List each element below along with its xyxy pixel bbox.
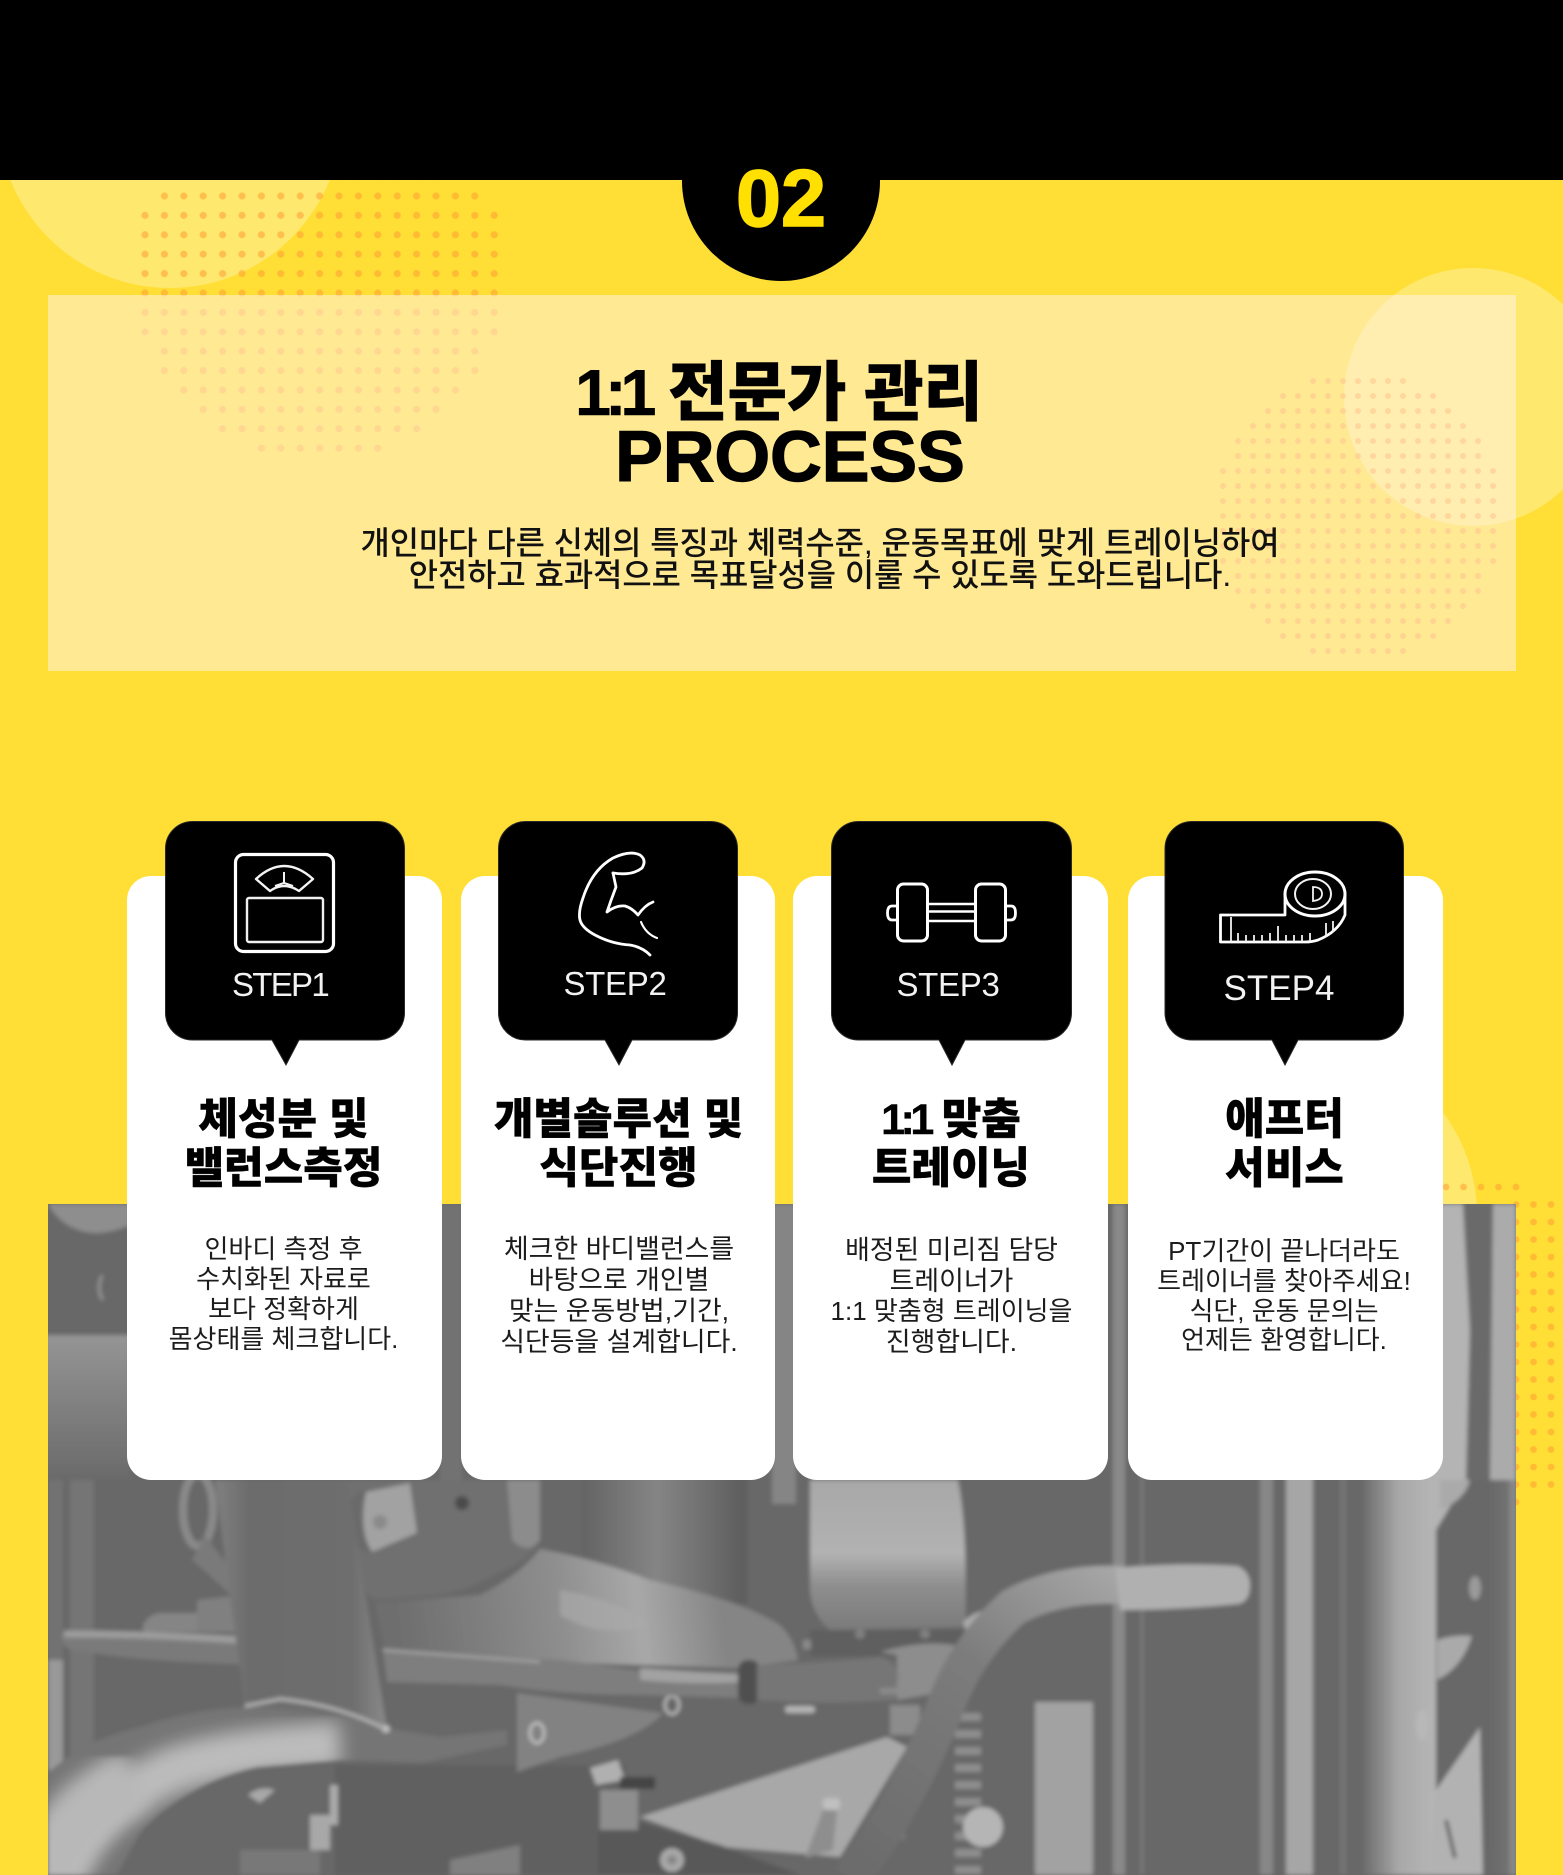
vertical stripes [48,1480,63,1875]
heading [575,357,983,497]
card: step 1 [127,821,442,1480]
chain [955,1713,981,1875]
upper left [40,1335,130,1480]
card title: 개별솔루션 및 [494,1096,743,1144]
lower plate [517,1693,663,1772]
card title: 1:1 맞춤 [881,1096,1021,1144]
card: step 2 [461,821,775,1480]
card title [185,1096,382,1192]
card description [169,1234,398,1354]
card description: 맞는 운동방법,기간, [509,1296,729,1326]
number 02: 02 [736,154,826,244]
card title: 애프터 [1225,1096,1344,1144]
number badge 02 [682,81,880,281]
grip [1115,1564,1250,1610]
card description [831,1235,1072,1357]
card description: 식단, 운동 문의는 [1189,1296,1379,1326]
step label: STEP4 [1224,969,1334,1008]
card description: 몸상태를 체크합니다. [169,1324,398,1354]
speech bubble with muscle icon [498,821,738,1066]
card title [872,1096,1030,1192]
backrest [340,1480,540,1600]
card description: 1:1 맞춤형 트레이닝을 [831,1296,1072,1326]
seat [375,1549,798,1668]
post [215,1480,387,1730]
card description: 수치화된 자료로 [196,1264,371,1294]
card description: 보다 정확하게 [208,1294,359,1324]
speech bubble with scale icon [165,821,405,1066]
intro line 2: 안전하고 효과적으로 목표달성을 이룰 수 있도록 도와드립니다. [409,557,1231,593]
right columns [1360,1204,1470,1875]
card title [494,1096,743,1192]
card title [1225,1096,1344,1192]
card description: 체크한 바디밸런스를 [504,1234,734,1264]
card background [793,876,1108,1480]
step label: STEP3 [896,966,1000,1003]
card description: 바탕으로 개인별 [529,1265,709,1295]
card background [1128,876,1443,1480]
lower dark mechanics [335,1765,625,1875]
panel: intro background [48,295,1516,671]
handle tube blob behind [963,1610,997,1640]
intro line 1: 개인마다 다른 신체의 특징과 체력수준, 운동목표에 맞게 트레이닝하여 [360,525,1280,561]
card description: 트레이너를 찾아주세요! [1157,1266,1411,1296]
speech bubble with measuring tape icon [1164,821,1404,1066]
card description: 배정된 미리짐 담당 [845,1235,1058,1265]
card title: 체성분 및 [198,1096,369,1144]
card background [127,876,442,1480]
heading line 1: 1:1 전문가 관리 [575,357,983,429]
card title: 식단진행 [539,1144,698,1192]
card description: 인바디 측정 후 [205,1234,362,1264]
card title: 트레이닝 [872,1144,1030,1192]
card title: 서비스 [1225,1144,1344,1192]
step label: STEP2 [563,965,667,1002]
top black band [0,0,1563,180]
diagonal light plate [640,1737,907,1857]
step label: STEP1 [232,966,328,1003]
card description: PT기간이 끝나더라도 [1168,1236,1400,1266]
card description: 진행합니다. [886,1327,1017,1357]
card description: 트레이너가 [890,1266,1013,1296]
background photo: gym machine [48,1204,1516,1875]
card description: 언제든 환영합니다. [1181,1325,1387,1355]
seat rail [383,1650,745,1698]
handle tube [850,1585,1123,1875]
speech bubble with dumbbell icon [831,821,1072,1066]
card description [500,1234,738,1357]
dark block and bolts [598,1822,800,1875]
heading line 2: PROCESS [615,417,965,497]
intro text [360,525,1280,593]
pad [810,1480,966,1630]
card title: 밸런스측정 [185,1144,382,1192]
perforated plate [1035,1702,1093,1875]
card background [461,876,775,1480]
weld line [245,1699,387,1730]
card description [1157,1236,1411,1355]
lower mechanics [240,1850,320,1875]
card: step 3 [793,821,1108,1480]
bottom curved tube [48,1707,507,1875]
card: step 4 [1128,821,1443,1480]
left tube [143,1613,197,1632]
left ring [183,1474,213,1546]
card description: 식단등을 설계합니다. [500,1327,738,1357]
